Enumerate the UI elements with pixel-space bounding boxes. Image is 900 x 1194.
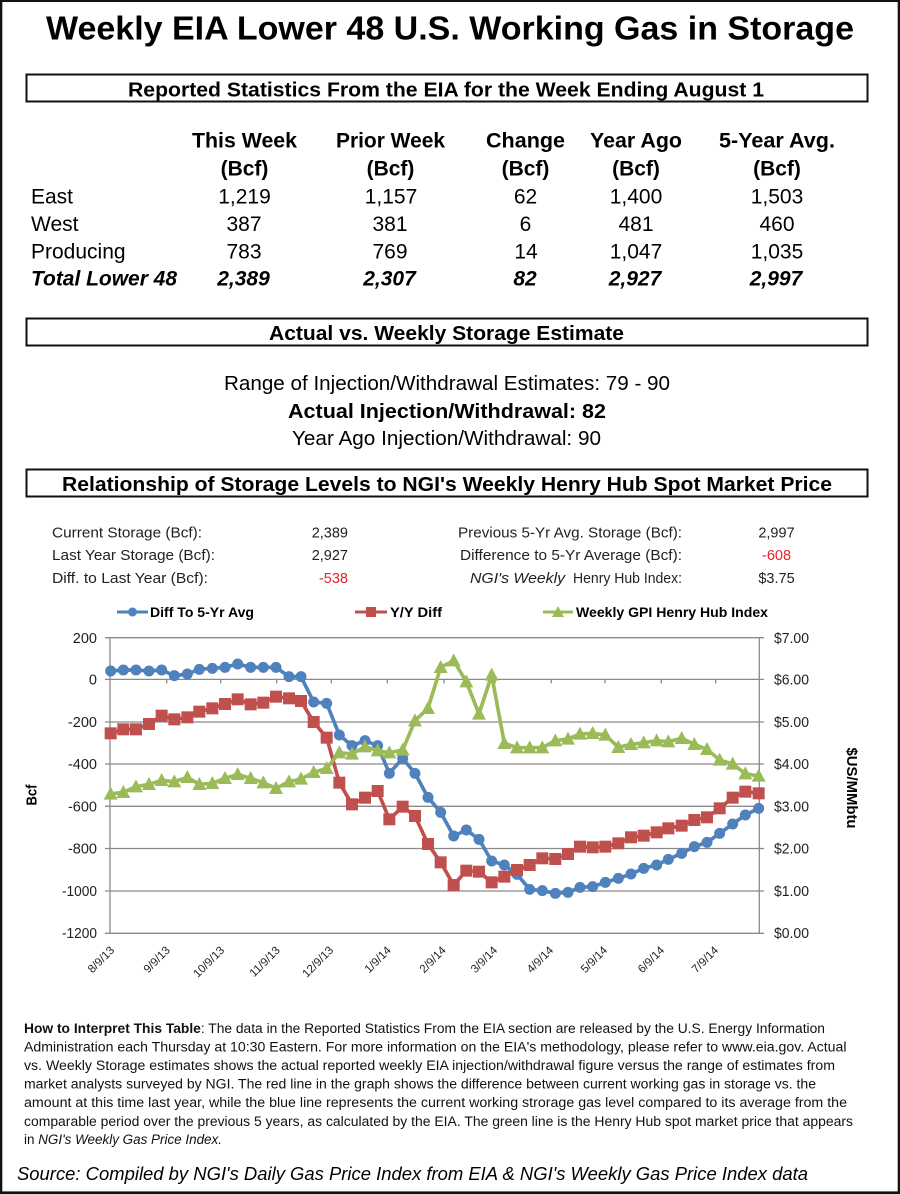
heading: actual vs estimate (26, 318, 868, 346)
table: reported statistics (31, 130, 835, 290)
text block: how to interpret: market analysts surveyed by NGI. The red line in the graph shows the difference between current working gas in storage vs. the (24, 1076, 816, 1092)
row: West: West (31, 213, 79, 236)
right axis labels: $1.00 (774, 884, 809, 900)
legend: henry hub index: Weekly GPI Henry Hub Index (576, 604, 768, 620)
series: diff to 5-yr avg (blue) (111, 664, 759, 893)
row: East: 62 (514, 186, 537, 208)
source line: Source: Compiled by NGI's Daily Gas Price Index from EIA & NGI's Weekly Gas Price Index data (17, 1163, 808, 1184)
table header row: Year Ago (590, 130, 682, 152)
row: West: 381 (372, 213, 408, 236)
date labels: 5/9/14 (579, 944, 611, 976)
text block: how to interpret: amount at this time last year, while the blue line represents the current working strorage gas level compared to its average from the (24, 1095, 847, 1110)
table header row: This Week (192, 130, 297, 152)
left axis title: Bcf (24, 784, 40, 806)
left axis labels: -1200 (62, 926, 97, 942)
left axis labels: -1000 (62, 884, 97, 900)
legend: diff to 5-yr avg: Diff To 5-Yr Avg (150, 604, 254, 620)
date labels: 11/9/13 (248, 945, 283, 980)
date labels: 4/9/14 (525, 944, 557, 976)
legend: y/y diff (355, 604, 442, 620)
stats: right column: $3.75 (758, 571, 795, 587)
row: Total Lower 48: 82 (513, 268, 537, 290)
row: West: 387 (226, 213, 262, 236)
row: Total Lower 48: 2,927 (608, 268, 663, 290)
date labels: 8/9/13 (86, 945, 117, 976)
stats: right column: 2,997 (758, 526, 795, 542)
stats: left column: Current Storage (Bcf): (52, 526, 202, 542)
right axis labels (774, 631, 809, 942)
left axis labels: -800 (68, 842, 97, 858)
right axis labels: $6.00 (774, 672, 809, 688)
table header row: (Bcf) (367, 158, 414, 180)
row: Producing (31, 240, 803, 264)
stats: left column: 2,389 (312, 526, 348, 542)
stats: right column: Henry Hub Index: (573, 571, 682, 587)
right axis labels: $5.00 (774, 715, 809, 731)
date labels: 12/9/13 (301, 945, 336, 980)
date labels: 2/9/14 (418, 944, 449, 976)
table header row (192, 130, 835, 180)
stats: left column: -538 (319, 571, 348, 587)
row: West: 6 (520, 213, 531, 236)
table header row: (Bcf) (753, 158, 801, 180)
row: Producing: 783 (226, 240, 262, 264)
text block: estimates: Range of Injection/Withdrawal Estimates: 79 - 90 (224, 373, 670, 395)
row: Total Lower 48: 2,307 (362, 268, 417, 290)
right axis labels: $3.00 (774, 800, 809, 816)
date labels: 6/9/14 (636, 944, 668, 976)
right axis labels: $4.00 (774, 757, 809, 773)
row: East (31, 186, 803, 208)
row: Producing: 14 (514, 240, 538, 264)
left axis labels: -200 (68, 715, 97, 731)
right axis labels: $2.00 (774, 842, 809, 858)
left axis labels: -400 (68, 757, 97, 773)
table header row: Prior Week (336, 130, 445, 152)
table header row: 5-Year Avg. (719, 130, 835, 152)
series: henry hub index (green) (111, 661, 759, 794)
legend (117, 604, 768, 620)
left axis labels: -600 (68, 800, 97, 816)
date labels (86, 944, 722, 980)
row: East: 1,219 (218, 186, 271, 208)
text block: how to interpret: comparable period over the previous 5 years, as calculated by the EIA. The green line is the Henry Hub spot market price that appears (24, 1114, 853, 1129)
text block: estimates: Actual Injection/Withdrawal: 82 (288, 401, 606, 423)
row: Total Lower 48 (31, 268, 804, 290)
right axis title: $US/MMbtu (843, 748, 860, 828)
stats: left column (52, 526, 348, 587)
stats: left column: Diff. to Last Year (Bcf): (52, 571, 208, 587)
row: West: 460 (759, 213, 795, 236)
row: Producing: 1,035 (751, 240, 803, 264)
date labels: 3/9/14 (469, 944, 501, 976)
series: y/y diff (red) (111, 697, 759, 885)
date labels: 9/9/13 (142, 945, 173, 976)
stats: right column: Previous 5-Yr Avg. Storage (Bcf): (458, 526, 682, 542)
text block: estimates (224, 373, 670, 450)
stats: right column: -608 (762, 548, 791, 564)
table header row: Change (486, 130, 565, 152)
stats: right column: NGI's Weekly (470, 571, 566, 587)
row: Producing: 1,047 (610, 240, 662, 264)
row: East: 1,503 (751, 186, 803, 208)
row: Total Lower 48: 2,389 (216, 268, 270, 290)
stats: right column (458, 526, 795, 587)
row: East: 1,400 (610, 186, 662, 208)
title: Weekly EIA Lower 48 U.S. Working Gas in Storage (46, 10, 854, 46)
text block: how to interpret: vs. Weekly Storage estimates shows the actual reported weekly EIA injection/withdrawal figure versus the range of estimates from (24, 1058, 835, 1073)
table header row: (Bcf) (502, 158, 549, 180)
left axis labels (62, 631, 97, 942)
right axis labels: $7.00 (774, 631, 809, 647)
right axis labels: $0.00 (774, 926, 809, 942)
stats: left column: Last Year Storage (Bcf): (52, 548, 215, 564)
row: East: 1,157 (365, 186, 417, 208)
line chart (24, 631, 860, 980)
date labels: 1/9/14 (363, 944, 394, 976)
heading: reported statistics: Reported Statistics From the EIA for the Week Ending August 1 (128, 78, 764, 102)
row: Producing: Producing (31, 240, 126, 264)
text block: how to interpret: in NGI's Weekly Gas Price Index. (24, 1132, 222, 1147)
text block: how to interpret: How to Interpret This Table : The data in the Reported Statistics From the EIA section are released by the U.S. Energy Information (24, 1021, 825, 1036)
stats: left column: 2,927 (312, 548, 348, 564)
date labels: 7/9/14 (690, 944, 722, 976)
left axis labels: 200 (73, 631, 97, 647)
row: East: East (31, 186, 73, 208)
row: Producing: 769 (372, 240, 408, 264)
stats: right column: Difference to 5-Yr Average (Bcf): (460, 548, 682, 564)
text block: how to interpret: Administration each Thursday at 10:30 Eastern. For more information on the EIA's methodology, please refer to www.eia.gov. Actual (24, 1040, 846, 1054)
row: West (31, 213, 795, 236)
text block: how to interpret (24, 1021, 853, 1147)
heading: actual vs estimate: Actual vs. Weekly Storage Estimate (269, 322, 624, 345)
table header row: (Bcf) (612, 158, 660, 180)
row: Total Lower 48: 2,997 (749, 268, 804, 290)
legend: y/y diff: Y/Y Diff (390, 604, 442, 620)
row: West: 481 (618, 213, 654, 236)
row: Total Lower 48: Total Lower 48 (31, 268, 177, 290)
table header row: (Bcf) (221, 158, 268, 180)
heading: storage vs price: Relationship of Storage Levels to NGI's Weekly Henry Hub Spot Market Price (62, 473, 832, 496)
heading: reported statistics (26, 74, 868, 102)
left axis labels: 0 (89, 672, 97, 688)
date labels: 10/9/13 (192, 945, 227, 980)
text block: estimates: Year Ago Injection/Withdrawal: 90 (292, 428, 601, 450)
